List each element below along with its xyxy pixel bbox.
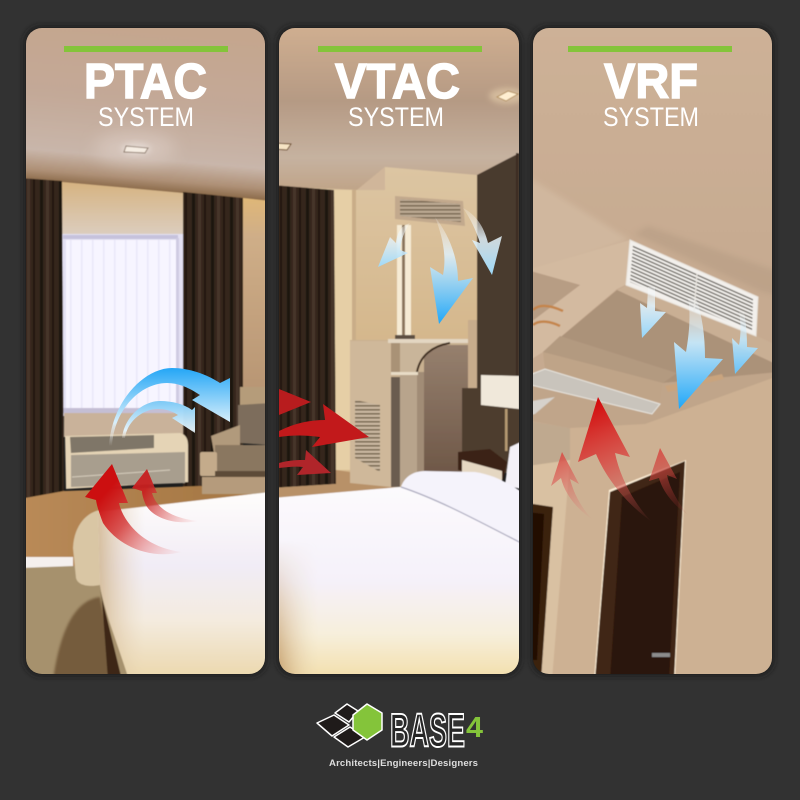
- lower wall: [527, 373, 778, 680]
- bed: [273, 471, 525, 680]
- ceiling light: [121, 143, 151, 155]
- logo mark: [317, 704, 382, 747]
- wall: [273, 167, 477, 490]
- heading: PTAC: PTAC: [84, 55, 207, 109]
- logo numeral 4: 4: [466, 712, 483, 744]
- tagline: Architects|Engineers|Designers: [329, 758, 478, 769]
- copper pipes: [533, 306, 563, 326]
- subheading: SYSTEM: SYSTEM: [348, 102, 444, 132]
- left curtain: [26, 178, 64, 498]
- panel: VTAC system: [273, 22, 525, 680]
- dark wall right: [476, 152, 519, 388]
- blue airflow arrow small: [122, 401, 195, 438]
- red airflow arrow right: [649, 448, 688, 515]
- wall AC grille: [395, 196, 465, 226]
- green accent bar: [318, 46, 482, 52]
- red airflow arrow middle: [279, 404, 369, 447]
- cabinet: [350, 339, 468, 490]
- pillow: [504, 442, 519, 490]
- door left: [527, 503, 553, 680]
- panel: PTAC system: [20, 22, 270, 680]
- nightstand: [458, 449, 507, 481]
- wood stub: [665, 374, 724, 392]
- red airflow arrow large: [85, 464, 182, 554]
- armchair: [200, 387, 270, 494]
- window: [62, 234, 183, 416]
- duct box: [527, 240, 778, 428]
- right curtain: [183, 192, 243, 490]
- blue airflow arrow large: [109, 368, 230, 446]
- wall right: [243, 198, 270, 400]
- subheading: SYSTEM: SYSTEM: [98, 102, 194, 132]
- PTAC unit: [65, 433, 188, 489]
- red airflow arrow large: [578, 397, 652, 522]
- green accent bar: [568, 46, 732, 52]
- logo: BASE4: [317, 704, 483, 769]
- subheading: SYSTEM: SYSTEM: [603, 102, 699, 132]
- floor: [26, 485, 252, 567]
- sheer curtain: [62, 182, 183, 240]
- headboard wall: [462, 388, 525, 473]
- blue airflow arrow center: [430, 217, 473, 324]
- heading: VTAC: VTAC: [335, 55, 460, 109]
- floor: [279, 470, 393, 498]
- bed: [73, 492, 270, 680]
- room scene: VTAC: [273, 22, 525, 680]
- blue airflow arrow left: [640, 287, 666, 338]
- room scene: VRF: [520, 22, 780, 680]
- rug: [26, 566, 128, 674]
- blue airflow arrow right: [732, 312, 758, 374]
- blue airflow arrow right: [463, 208, 502, 275]
- red airflow arrow bottom: [279, 450, 331, 475]
- room scene: PTAC: [20, 22, 270, 680]
- lamp: [481, 375, 519, 451]
- wall strip: [395, 225, 415, 342]
- curtain: [273, 185, 336, 488]
- heading: VRF: VRF: [604, 55, 698, 109]
- red airflow arrow top: [279, 389, 311, 415]
- panel shadows: [24, 26, 774, 676]
- ceiling grille: [626, 240, 758, 336]
- door center: [594, 460, 686, 680]
- green accent bar: [64, 46, 228, 52]
- blue airflow arrow left: [378, 223, 410, 267]
- blue airflow arrow center: [674, 298, 723, 409]
- ceiling planes: [520, 172, 630, 280]
- panel: VRF system: [520, 22, 780, 680]
- logo wordmark: BASE: [390, 704, 465, 756]
- red airflow arrow small: [132, 469, 198, 522]
- red airflow arrow left: [551, 452, 593, 520]
- ceiling lights: [273, 88, 525, 150]
- lower grille: [527, 369, 660, 414]
